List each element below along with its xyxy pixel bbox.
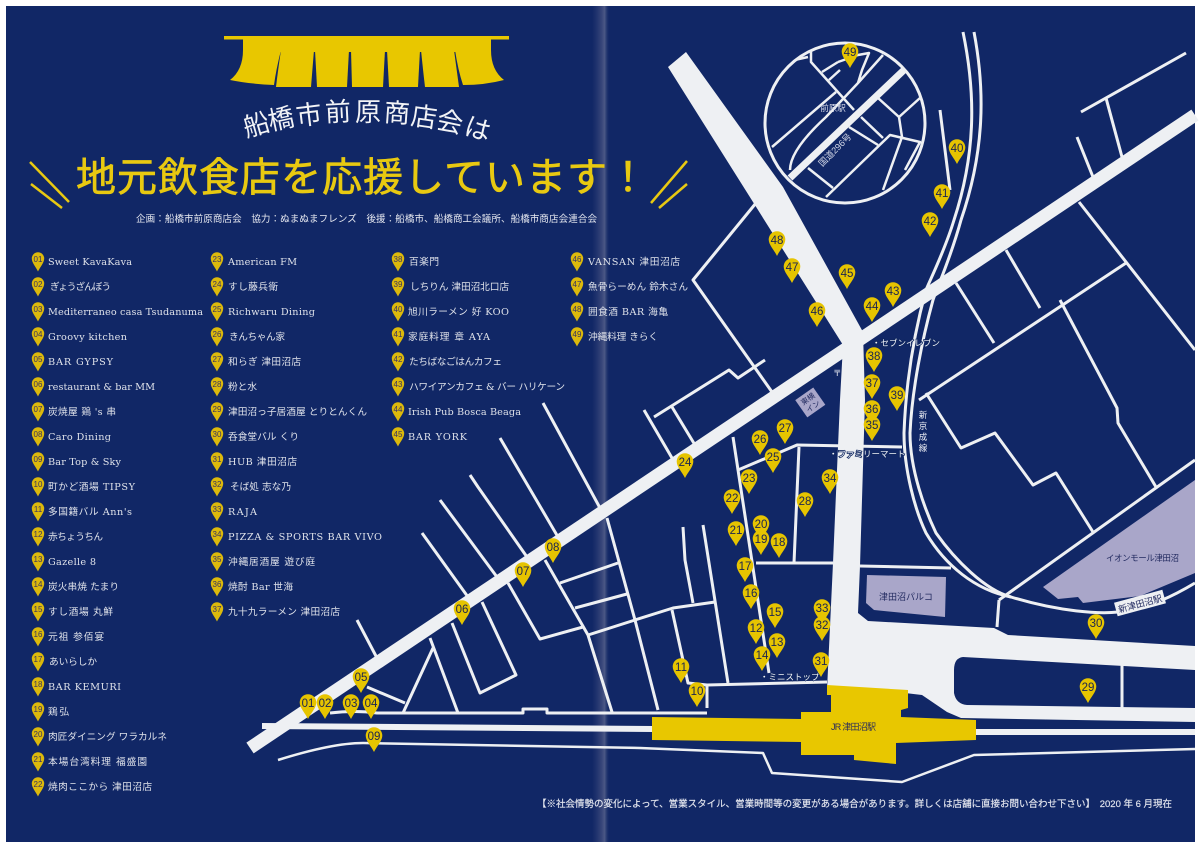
shop list column 1: Bar Top & Sky xyxy=(48,457,122,468)
map xyxy=(250,32,1195,782)
shop list column 1: 15 xyxy=(34,605,43,614)
map pins: 15 xyxy=(769,607,781,619)
shop list column 3: 百楽門 xyxy=(409,255,439,268)
Toyoko Inn building: イン xyxy=(804,399,822,414)
shop list column 2: 九十九ラーメン 津田沼店 xyxy=(228,605,340,618)
shop list column 1: 20 xyxy=(34,730,43,739)
shop list column 1: 04 xyxy=(34,330,43,339)
map pins: 14 xyxy=(756,650,769,662)
shop list column 2: 30 xyxy=(213,430,222,439)
map pins: 39 xyxy=(891,390,903,402)
map place labels: 京 xyxy=(919,421,928,431)
map pins: 09 xyxy=(368,731,380,743)
shop list column 1: 14 xyxy=(34,580,43,589)
shop list column 2: Richwaru Dining xyxy=(228,307,315,318)
map pins: 06 xyxy=(456,604,468,616)
map pins: 49 xyxy=(844,47,856,59)
map pins: 32 xyxy=(816,620,828,632)
Toyoko Inn building xyxy=(795,387,825,417)
map pins: 24 xyxy=(679,457,692,469)
shop list column 2 xyxy=(211,252,382,622)
map pins: 10 xyxy=(691,686,703,698)
shop list column 3: 43 xyxy=(394,380,403,389)
shop list column 3: 家庭料理 章 AYA xyxy=(408,330,491,343)
shop list column 2: 24 xyxy=(213,280,222,289)
inset circle map: 国道296号 xyxy=(816,131,853,168)
map pins: 12 xyxy=(750,623,762,635)
shop list column 2: 36 xyxy=(213,580,222,589)
map place labels: 線 xyxy=(919,443,928,453)
footer notice: 【※社会情勢の変化によって、営業スタイル、営業時間等の変更がある場合があります。詳しくは店舗に直接お問い合わせ下さい】 2020 年 6 月現在 xyxy=(537,798,1172,810)
shop list column 1: BAR GYPSY xyxy=(48,357,114,368)
heading: shopping association: 市 xyxy=(294,99,324,131)
shop list column 1: 08 xyxy=(34,430,43,439)
shop list column 3: 45 xyxy=(394,430,403,439)
shop list column 1: Mediterraneo casa Tsudanuma xyxy=(48,307,203,318)
shop list column 2: 34 xyxy=(213,530,222,539)
shop list column 2: 27 xyxy=(213,355,222,364)
shop list column 1: 12 xyxy=(34,530,43,539)
shop list column 2: 31 xyxy=(213,455,222,464)
shop list column 2: 32 xyxy=(213,480,222,489)
shop list column 1: 09 xyxy=(34,455,43,464)
map pins: 37 xyxy=(866,378,878,390)
shop list column 1: Sweet KavaKava xyxy=(48,257,132,268)
shop list column 4: 魚骨らーめん 鈴木さん xyxy=(588,280,688,293)
shop list column 4: VANSAN 津田沼店 xyxy=(587,255,680,268)
shop list column 1: 21 xyxy=(34,755,43,764)
map pins: 43 xyxy=(887,286,899,298)
map place labels: ・ミニストップ xyxy=(760,672,820,682)
shop list column 3 xyxy=(392,252,565,446)
map pins: 33 xyxy=(816,603,828,615)
shop list column 3: ハワイアンカフェ & バー ハリケーン xyxy=(409,381,565,393)
JR Tsudanuma station: JR 津田沼駅 xyxy=(831,722,876,732)
shop list column 1: Caro Dining xyxy=(48,432,111,443)
map pins: 05 xyxy=(355,672,367,684)
shop list column 1: 11 xyxy=(34,505,43,514)
shop list column 1: 町かど酒場 TIPSY xyxy=(48,480,136,493)
shop list column 4: 48 xyxy=(573,305,582,314)
shop list column 1: Groovy kitchen xyxy=(48,332,127,343)
map place labels: 新 xyxy=(919,410,928,420)
heading: shopping association: 船 xyxy=(240,107,273,143)
shop list column 3: 44 xyxy=(394,405,403,414)
inset circle map: 前原駅 xyxy=(820,103,846,113)
shop list column 1: 炭火串焼 たまり xyxy=(48,580,119,593)
shop list column 2: 津田沼っ子居酒屋 とりとんくん xyxy=(228,405,367,418)
map pins: 38 xyxy=(868,351,880,363)
shop list column 2: 23 xyxy=(213,255,222,264)
map pins: 19 xyxy=(755,534,767,546)
shop list column 3: 41 xyxy=(394,330,403,339)
map pins: 07 xyxy=(517,566,529,578)
map pins: 04 xyxy=(365,698,378,710)
map pins: 11 xyxy=(675,662,687,674)
Parco building: 津田沼パルコ xyxy=(879,592,933,602)
map pins: 36 xyxy=(866,404,878,416)
Parco building xyxy=(866,575,946,617)
map pins: 47 xyxy=(786,262,798,274)
map pins: 40 xyxy=(951,143,963,155)
shop list column 3: たちばなごはんカフェ xyxy=(409,355,502,368)
shop list column 3: 旭川ラーメン 好 KOO xyxy=(408,305,509,318)
shop list column 1: すし酒場 丸鮮 xyxy=(48,605,113,618)
shop list column 1: 19 xyxy=(34,705,43,714)
map place labels: 〒 xyxy=(833,368,842,378)
map place labels: ・セブンイレブン xyxy=(872,338,940,348)
shop list column 4: 46 xyxy=(573,255,582,264)
map pins: 48 xyxy=(771,235,783,247)
shop list column 1: 06 xyxy=(34,380,43,389)
shop list column 3: BAR YORK xyxy=(408,432,468,443)
map pins: 13 xyxy=(771,637,783,649)
map pins: 21 xyxy=(730,525,742,537)
shop list column 3: しちりん 津田沼北口店 xyxy=(410,280,509,293)
shop list column 3: 38 xyxy=(394,255,403,264)
Aeon Mall building xyxy=(1043,480,1195,603)
inset circle map xyxy=(765,43,925,203)
shop list column 4: 49 xyxy=(573,330,582,339)
map pins: 45 xyxy=(841,268,853,280)
shop list column 4: 囲食酒 BAR 海亀 xyxy=(588,305,668,318)
map place labels xyxy=(760,338,940,682)
shop list column 4: 47 xyxy=(573,280,582,289)
shop list column 1: 07 xyxy=(34,405,43,414)
shop list column 3: 42 xyxy=(394,355,403,364)
noren curtain icon xyxy=(224,36,509,87)
shop list column 1: 焼肉ここから 津田沼店 xyxy=(48,780,152,793)
map pins: 17 xyxy=(739,561,751,573)
shop list column 2: 粉と水 xyxy=(228,380,257,393)
map pins: 02 xyxy=(319,698,331,710)
shop list column 2: 沖縄居酒屋 遊び庭 xyxy=(228,555,315,568)
heading: shopping association: 橋 xyxy=(265,102,297,136)
shop list column 2: 焼酎 Bar 世海 xyxy=(228,580,293,593)
shop list column 1: BAR KEMURI xyxy=(48,682,121,693)
shop list column 1: 22 xyxy=(34,780,43,789)
shop list column 1: 05 xyxy=(34,355,43,364)
shop list column 2: HUB 津田沼店 xyxy=(228,455,297,468)
JR Tsudanuma station xyxy=(652,685,976,764)
map pins: 03 xyxy=(345,698,357,710)
shop list column 1: 炭焼屋 鶏 's 串 xyxy=(48,405,116,418)
map pins: 16 xyxy=(745,588,757,600)
thin streets xyxy=(278,32,1195,782)
heading: shopping association: 商 xyxy=(383,97,411,129)
map pins: 27 xyxy=(779,423,791,435)
Toyoko Inn building: 東横 xyxy=(799,390,817,407)
map pins: 31 xyxy=(815,656,827,668)
shop list column 1: 多国籍バル Ann's xyxy=(48,505,132,518)
shop list column 2: すし藤兵衛 xyxy=(228,280,278,293)
shop list column 2: RAJA xyxy=(228,507,258,518)
shop list column 1: 10 xyxy=(34,480,43,489)
shop list column 1: 03 xyxy=(34,305,43,314)
map pins: 18 xyxy=(773,537,785,549)
shop list column 3: Irish Pub Bosca Beaga xyxy=(408,407,521,418)
shop list column 1: 鶏弘 xyxy=(48,705,69,718)
shop list column 2: 29 xyxy=(213,405,222,414)
map place labels: 成 xyxy=(919,432,928,442)
main roads xyxy=(668,52,1195,722)
map pins: 20 xyxy=(755,519,767,531)
map pins: 08 xyxy=(547,542,559,554)
shop list column 2: 28 xyxy=(213,380,222,389)
shop list column 1: 13 xyxy=(34,555,43,564)
shop list column 2: 呑食堂バル くり xyxy=(228,431,299,443)
map pins: 34 xyxy=(824,473,837,485)
shop list column 1: 18 xyxy=(34,680,43,689)
map pins: 22 xyxy=(726,493,738,505)
heading: shopping association: は xyxy=(461,111,494,147)
map pins: 29 xyxy=(1082,682,1094,694)
shop list column 4 xyxy=(571,252,688,346)
map pins: 23 xyxy=(743,473,755,485)
shop list column 1: 17 xyxy=(34,655,43,664)
shop list column 1: 01 xyxy=(34,255,43,264)
heading: shopping association: 前 xyxy=(324,96,352,128)
heading: shopping association: 店 xyxy=(409,100,439,134)
map pins: 28 xyxy=(799,496,811,508)
shop list column 2: 26 xyxy=(213,330,222,339)
map place labels: ・ファミリーマート xyxy=(829,449,906,459)
shop list column 3: 39 xyxy=(394,280,403,289)
shop list column 2: PIZZA & SPORTS BAR VIVO xyxy=(228,532,382,543)
shop list column 1: 本場台湾料理 福盛園 xyxy=(48,755,147,768)
heading: shopping association: 会 xyxy=(434,105,466,139)
map pins: 42 xyxy=(924,216,936,228)
shop list column 3: 40 xyxy=(394,305,403,314)
map pins: 30 xyxy=(1090,618,1102,630)
heading: shopping association xyxy=(240,96,494,147)
shop list column 2: 25 xyxy=(213,305,222,314)
map pins: 25 xyxy=(767,452,779,464)
shop list column 1: ぎょうざんぼう xyxy=(50,280,111,293)
shop list column 2: 33 xyxy=(213,505,222,514)
shop list column 1: 肉匠ダイニング ワラカルネ xyxy=(48,730,167,743)
shop list column 2: きんちゃん家 xyxy=(229,330,285,343)
shop list column 1: restaurant & bar MM xyxy=(48,382,155,393)
shop list column 1: 元祖 参佰宴 xyxy=(48,630,104,643)
title accent strokes xyxy=(30,161,687,208)
credits line: 企画：船橋市前原商店会 協力：ぬまぬまフレンズ 後援：船橋市、船橋商工会議所、船橋市商店会連合会 xyxy=(136,213,597,225)
shop list column 2: American FM xyxy=(227,257,297,268)
map pins xyxy=(300,43,1104,752)
shop list column 2: 和らぎ 津田沼店 xyxy=(228,355,301,368)
shop list column 1: 赤ちょうちん xyxy=(48,531,103,543)
Aeon Mall building: イオンモール津田沼 xyxy=(1106,553,1179,563)
map pins: 35 xyxy=(866,420,878,432)
shop list column 2: 37 xyxy=(213,605,222,614)
Shin-Tsudanuma station label: 新津田沼駅 xyxy=(1117,593,1163,615)
map pins: 26 xyxy=(754,434,766,446)
shop list column 1 xyxy=(32,252,203,797)
shop list column 1: 16 xyxy=(34,630,43,639)
main title: 地元飲食店を応援しています！ xyxy=(76,156,648,200)
map pins: 46 xyxy=(811,306,823,318)
shop list column 2: そば処 志な乃 xyxy=(230,480,291,493)
shop list column 1: あいらしか xyxy=(49,656,97,668)
shop list column 4: 沖縄料理 きらく xyxy=(588,330,658,343)
shop list column 1: Gazelle 8 xyxy=(48,557,96,568)
map pins: 44 xyxy=(866,301,879,313)
map pins: 41 xyxy=(936,188,948,200)
shop list column 1: 02 xyxy=(34,280,43,289)
heading: shopping association: 原 xyxy=(355,97,381,127)
map pins: 01 xyxy=(302,698,314,710)
shop list column 2: 35 xyxy=(213,555,222,564)
